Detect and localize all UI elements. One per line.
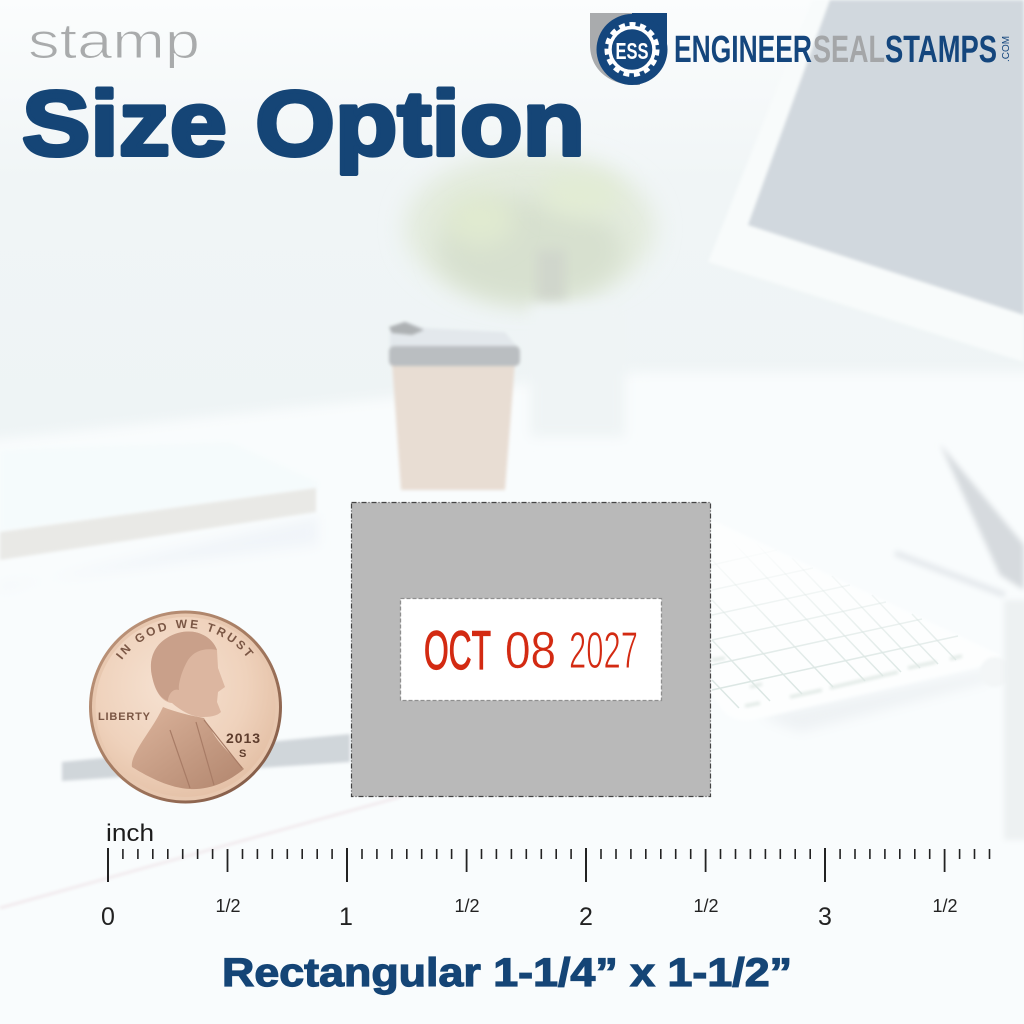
ruler half labels: 1/2 <box>693 896 719 916</box>
penny: LIBERTY: LIBERTY <box>98 711 151 723</box>
ruler half labels: 1/2 <box>454 896 480 916</box>
coffee cup <box>389 322 520 490</box>
caption: stamp dimensions: Rectangular 1-1/4” x 1-1/2” <box>222 951 792 995</box>
penny: motto: IN GOD WE TRUST <box>116 620 254 660</box>
ruler <box>101 820 990 931</box>
date: day: 08 <box>505 622 556 680</box>
ruler numbers: 0 <box>101 903 115 931</box>
penny <box>89 610 282 804</box>
logo wordmark <box>674 29 997 71</box>
logo badge <box>590 13 668 85</box>
paper edge <box>0 797 400 908</box>
monitor <box>708 0 1024 362</box>
logo .com: .COM <box>1001 36 1012 62</box>
glass <box>1004 600 1024 840</box>
penny: bust of Lincoln <box>132 632 244 789</box>
penny: year: 2013 <box>226 730 260 746</box>
logo wordmark: ENGINEER <box>674 29 812 71</box>
ruler numbers: 2 <box>579 903 593 931</box>
notebook <box>0 442 318 590</box>
ruler ticks <box>108 848 990 882</box>
stamp size panel <box>352 502 710 796</box>
title: Size Option: Size Option <box>22 73 585 175</box>
keyboard <box>712 520 1010 732</box>
ruler half labels: 1/2 <box>215 896 241 916</box>
pencils <box>895 444 1024 595</box>
logo wordmark: SEAL <box>813 29 885 71</box>
ruler half labels <box>215 896 958 916</box>
impression area <box>400 598 662 700</box>
date: month: OCT <box>424 619 491 681</box>
date: year: 2027 <box>569 622 638 680</box>
label: stamp: stamp <box>28 13 200 69</box>
pen <box>62 734 350 781</box>
penny: mint mark: S <box>239 748 246 760</box>
ruler half labels: 1/2 <box>932 896 958 916</box>
logo badge: ESS <box>616 38 648 64</box>
ruler numbers: 3 <box>818 903 832 931</box>
plant <box>405 153 655 437</box>
ruler unit: inch <box>106 820 154 847</box>
ruler numbers: 1 <box>339 903 353 931</box>
logo: Engineer Seal Stamps <box>590 13 1012 85</box>
ruler numbers <box>101 903 832 931</box>
